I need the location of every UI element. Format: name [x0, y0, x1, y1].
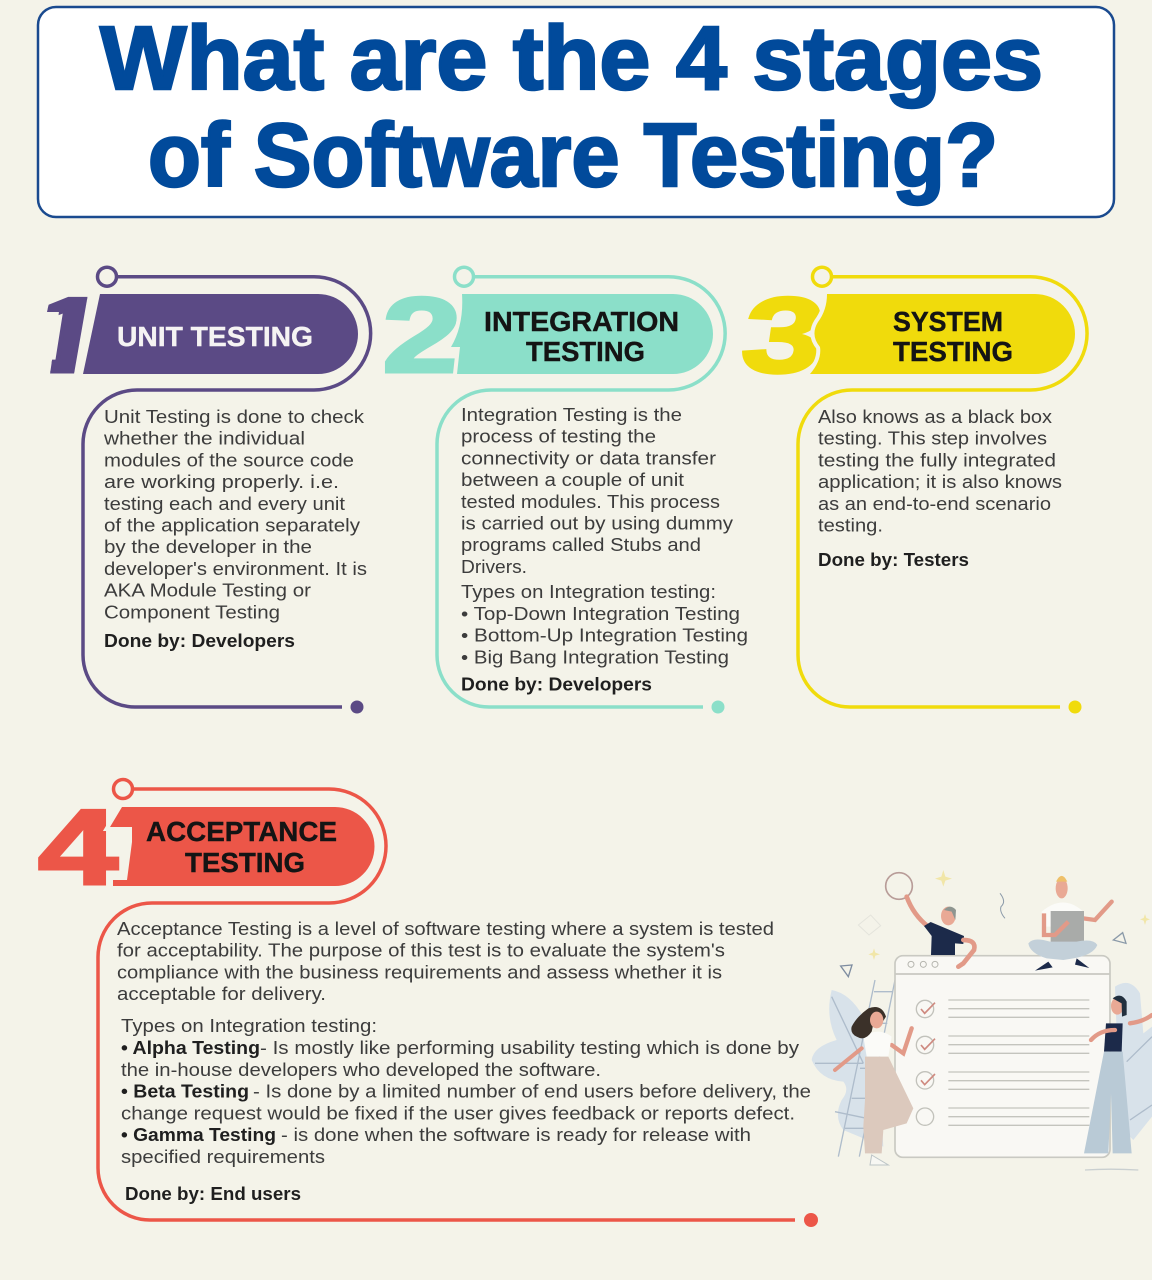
body text 1: whether the individual	[103, 429, 305, 449]
body text 2: • Top-Down Integration Testing	[461, 604, 740, 624]
woman on ladder	[835, 1007, 913, 1165]
heading 4: ACCEPTANCE	[146, 816, 337, 847]
body text 3: testing.	[818, 516, 883, 536]
ring marker 3	[812, 267, 832, 286]
body text 4: - Is mostly like performing usability testing which is done by	[260, 1038, 799, 1058]
body text 1: Done by: Developers	[104, 631, 295, 651]
body text 4: compliance with the business requirements and assess whether it is	[117, 962, 722, 982]
checklist window	[895, 956, 1110, 1157]
ring marker 2	[454, 267, 474, 286]
end dot 4	[804, 1213, 818, 1227]
ring marker 4	[114, 780, 132, 798]
body text 3: testing. This step involves	[818, 429, 1047, 449]
body text 1: modules of the source code	[104, 450, 354, 470]
numeral 1: 1	[14, 276, 123, 395]
body text 1: by the developer in the	[104, 537, 312, 557]
numeral 4: 4	[38, 787, 118, 907]
body text 2: Integration Testing is the	[461, 405, 682, 425]
numeral 2: 2	[382, 275, 462, 395]
panel: stage 2 integration testing	[382, 267, 748, 714]
heading 3	[893, 306, 1013, 367]
body text 4: • Gamma Testing	[121, 1125, 276, 1145]
body text 2: Types on Integration testing:	[461, 582, 716, 602]
heading 4: TESTING	[185, 847, 305, 878]
body text 4: Done by: End users	[125, 1184, 301, 1204]
numeral 3: 3	[735, 275, 832, 395]
body text 1: are working properly. i.e.	[104, 472, 339, 492]
panel: stage 3 system testing	[735, 267, 1087, 714]
heading pill 3	[810, 294, 1075, 374]
body text 3: as an end-to-end scenario	[818, 494, 1051, 514]
body text 4: for acceptability. The purpose of this test is to evaluate the system's	[117, 941, 725, 961]
heading 2	[484, 306, 679, 367]
sparkles and shapes	[841, 870, 1150, 977]
body text 4	[117, 919, 811, 1204]
title banner	[38, 7, 1114, 217]
body text 4: - Is done by a limited number of end users before delivery, the	[253, 1082, 811, 1102]
left foliage	[812, 990, 883, 1147]
connector outline 4	[98, 789, 795, 1220]
body text 3	[818, 407, 1062, 570]
body text 2: connectivity or data transfer	[461, 448, 716, 468]
body text 1: of the application separately	[104, 516, 360, 536]
body text 2: • Bottom-Up Integration Testing	[461, 626, 748, 646]
connector outline 3	[798, 277, 1087, 707]
body text 4: - is done when the software is ready for release with	[281, 1125, 751, 1145]
woman with phone	[1084, 996, 1152, 1170]
title banner: of Software Testing?	[148, 106, 998, 206]
heading 2: TESTING	[526, 336, 645, 367]
body text 1: developer's environment. It is	[104, 559, 367, 579]
panel: stage 1 unit testing	[14, 267, 371, 714]
body text 2: is carried out by using dummy	[461, 514, 733, 534]
body text 4: • Alpha Testing	[121, 1038, 260, 1058]
heading 1: UNIT TESTING	[117, 321, 313, 352]
right foliage	[1115, 983, 1152, 1140]
man on laptop	[1028, 876, 1112, 971]
body text 2	[461, 405, 748, 694]
heading 2: INTEGRATION	[484, 306, 679, 337]
body text 4: the in-house developers who developed the software.	[121, 1060, 601, 1080]
man with ring	[886, 873, 974, 967]
body text 3: testing the fully integrated	[818, 450, 1056, 470]
heading 3: SYSTEM	[893, 306, 1003, 337]
body text 2: Done by: Developers	[461, 674, 652, 694]
connector outline 1	[83, 277, 371, 707]
panel: stage 4 acceptance testing	[38, 780, 818, 1227]
body text 4: acceptable for delivery.	[117, 984, 326, 1004]
heading 3: TESTING	[893, 336, 1013, 367]
body text 2: process of testing the	[461, 427, 656, 447]
body text 2: Drivers.	[461, 557, 527, 577]
body text 3: Done by: Testers	[818, 550, 969, 570]
ladder	[815, 980, 895, 1157]
body text 2: between a couple of unit	[461, 470, 684, 490]
heading pill 1	[83, 294, 358, 374]
body text 1: Component Testing	[104, 602, 280, 622]
heading pill 2	[451, 294, 713, 374]
body text 4: change request would be fixed if the user gives feedback or reports defect.	[121, 1104, 795, 1124]
body text 4: Types on Integration testing:	[121, 1016, 377, 1036]
body text 3: Also knows as a black box	[818, 407, 1052, 427]
body text 2: tested modules. This process	[461, 492, 720, 512]
end dot 1	[350, 700, 364, 714]
connector outline 2	[437, 277, 725, 707]
end dot 3	[1068, 700, 1082, 714]
body text 2: programs called Stubs and	[461, 535, 701, 555]
body text 4: specified requirements	[121, 1147, 325, 1167]
body text 1: testing each and every unit	[104, 494, 345, 514]
heading pill 4	[110, 807, 375, 886]
body text 1: AKA Module Testing or	[104, 581, 311, 601]
body text 2: • Big Bang Integration Testing	[461, 647, 729, 667]
body text 1	[103, 407, 367, 651]
illustration: team with checklist	[812, 870, 1152, 1170]
heading 4	[146, 816, 337, 878]
body text 1: Unit Testing is done to check	[104, 407, 365, 427]
ring marker 1	[98, 267, 116, 286]
title banner: What are the 4 stages	[100, 9, 1043, 109]
body text 4: Acceptance Testing is a level of software testing where a system is tested	[117, 919, 774, 939]
end dot 2	[712, 700, 724, 714]
body text 3: application; it is also knows	[818, 472, 1062, 492]
body text 4: • Beta Testing	[121, 1082, 249, 1102]
